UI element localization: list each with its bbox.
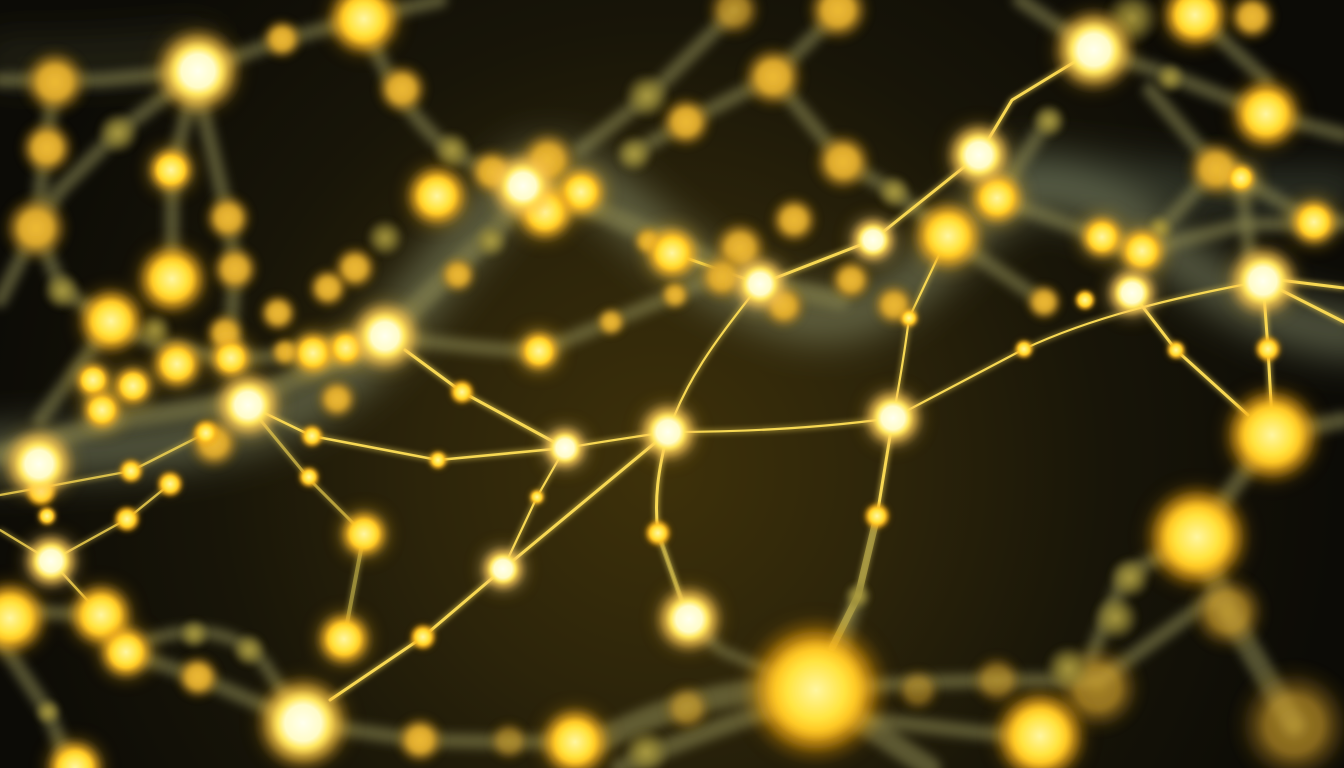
white-hot hub nodes xyxy=(1,120,1301,655)
smoky band xyxy=(0,50,1344,455)
small filament beads xyxy=(23,288,1283,652)
